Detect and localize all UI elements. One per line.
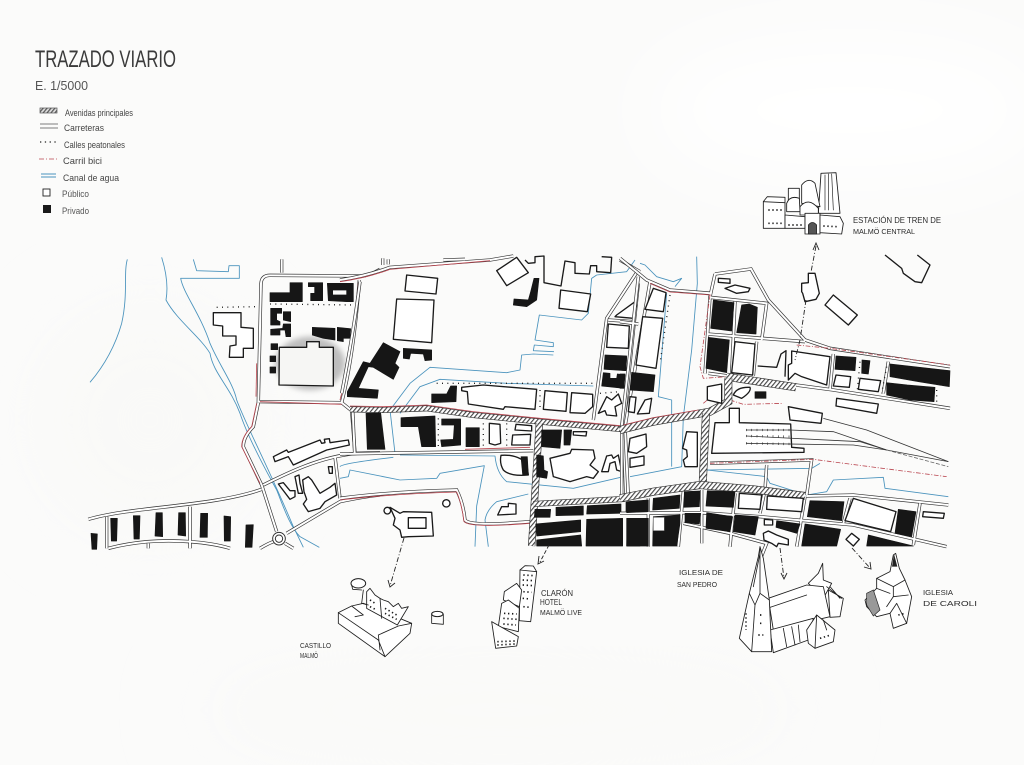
- roundabout: [273, 532, 285, 545]
- scale: E. 1/5000: [35, 78, 88, 93]
- smudge: [275, 337, 345, 390]
- label: castillo: CASTILLO: [300, 641, 331, 650]
- sketch: iglesia de caroli: [865, 553, 912, 628]
- residential row: [91, 513, 253, 549]
- label: iglesia de san pedro: [677, 570, 723, 589]
- railway tracks: [746, 418, 948, 467]
- label: estación de tren: [853, 216, 941, 236]
- label: clarion hotel: MALMÖ LIVE: [540, 609, 582, 617]
- title: TRAZADO VIARIO: [35, 46, 176, 73]
- legend: canal de agua: Canal de agua: [63, 173, 120, 184]
- map: central section: [340, 256, 640, 547]
- roads west: [88, 259, 380, 548]
- label: castillo: MALMÖ: [300, 651, 318, 660]
- arrows to landmarks: [388, 243, 871, 587]
- label: iglesia de caroli: [923, 588, 977, 608]
- label: estación de tren: ESTACIÓN DE TREN DE: [853, 216, 941, 225]
- legend: calles peatonales: Calles peatonales: [64, 140, 125, 151]
- label: iglesia de caroli: IGLESIA: [923, 588, 953, 597]
- city blocks east: [627, 491, 944, 546]
- label: iglesia de san pedro: SAN PEDRO: [677, 582, 718, 589]
- legend: carril bici: Carril bici: [63, 156, 102, 167]
- castle plan: [384, 500, 516, 537]
- label: iglesia de caroli: DE CAROLI: [923, 599, 977, 608]
- canals west: [90, 257, 319, 547]
- arrow: hotel: [538, 545, 549, 564]
- church plans: [763, 531, 859, 547]
- sketch: estación de tren: [763, 173, 843, 234]
- label: castillo: [300, 641, 331, 660]
- arrow: caroli: [852, 548, 871, 569]
- sketch: castillo: [338, 579, 443, 657]
- legend: público: Público: [62, 189, 89, 200]
- pedestrian dots centre: [437, 383, 620, 447]
- label: clarion hotel: [540, 588, 582, 617]
- arrow: san pedro: [780, 548, 787, 579]
- arrow: estación: [795, 243, 819, 360]
- legend: avenidas principales: Avenidas principales: [65, 108, 133, 119]
- arrow: castle: [388, 538, 404, 587]
- legend: carreteras: Carreteras: [64, 123, 104, 134]
- city blocks centre: [534, 502, 640, 546]
- hatched avenues centre: [350, 405, 640, 546]
- buildings east: [620, 255, 950, 467]
- legend: privado: Privado: [62, 206, 89, 217]
- canals east: [630, 257, 948, 497]
- legend: [39, 108, 133, 217]
- label: estación de tren: MALMÖ CENTRAL: [853, 227, 915, 236]
- sketch: clarion hotel: [492, 566, 537, 648]
- label: clarion hotel: CLARÓN: [541, 588, 573, 598]
- roads centre: [340, 256, 640, 525]
- canals centre: [340, 260, 635, 547]
- pedestrian dots: [217, 304, 353, 307]
- label: iglesia de san pedro: IGLESIA DE: [679, 570, 723, 577]
- roads east: [620, 258, 950, 560]
- pedestrian dots east: [660, 295, 937, 405]
- map: western section: [88, 257, 380, 549]
- sketch: iglesia de san pedro: [739, 547, 843, 653]
- buildings west: [213, 283, 353, 512]
- map: eastern section: [620, 255, 950, 560]
- hatched avenues east: [620, 377, 805, 498]
- label: clarion hotel: HOTEL: [540, 597, 562, 607]
- buildings centre: [347, 256, 637, 482]
